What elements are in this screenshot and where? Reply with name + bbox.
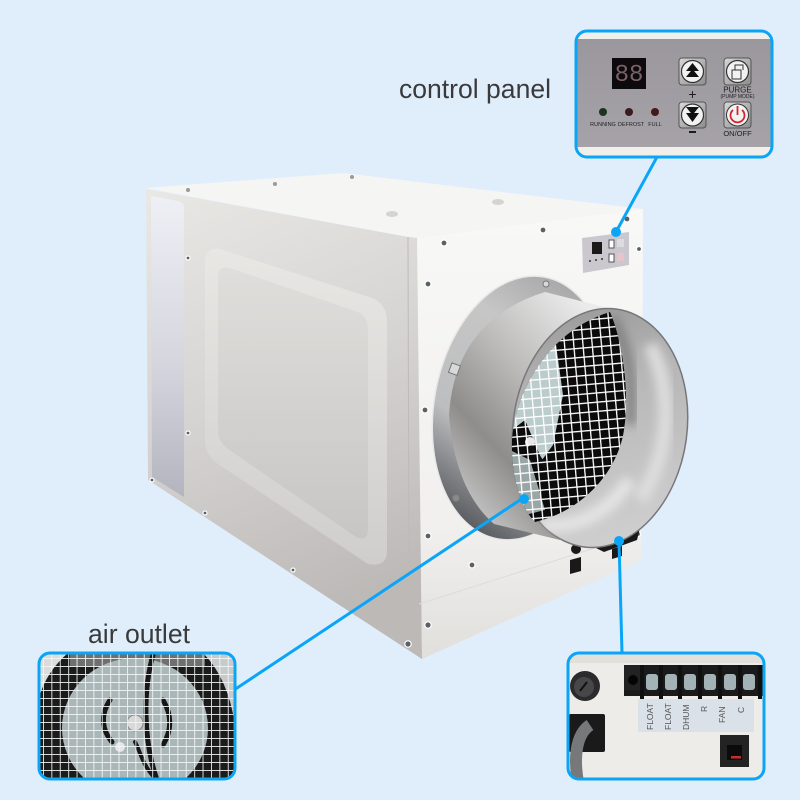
connector: air outlet	[234, 494, 529, 690]
mounting flange	[412, 262, 630, 554]
inset: air outlet close-up	[39, 653, 235, 798]
terminal labels: R	[699, 706, 709, 712]
connector: terminal block	[614, 536, 624, 653]
terminal labels: FLOAT	[645, 703, 655, 730]
up button	[679, 58, 706, 85]
embossed side panel	[205, 249, 387, 565]
bottom terminals and ports	[570, 528, 640, 574]
RJ phone jack	[720, 735, 749, 767]
down button	[679, 102, 706, 128]
terminal labels: FAN	[717, 706, 727, 723]
fan hub	[127, 715, 143, 731]
terminal block	[624, 665, 764, 699]
plus sign: +	[688, 86, 697, 102]
connector: control panel	[611, 157, 657, 237]
status lights: FULL	[648, 122, 662, 128]
duct body	[449, 292, 612, 540]
heading: control panel: control panel	[399, 74, 551, 104]
on/off button: ON/OFF	[723, 129, 752, 138]
digital display: 88	[615, 62, 643, 89]
wire mesh	[39, 653, 235, 779]
purge button: (PUMP MODE)	[720, 94, 755, 100]
flange brackets	[449, 281, 549, 502]
minus sign	[689, 131, 696, 133]
inset: terminal block close-up	[568, 653, 764, 782]
dehumidifier unit	[145, 173, 703, 659]
terminal labels	[638, 699, 754, 732]
fan blades	[103, 655, 170, 780]
duct opening	[512, 308, 688, 548]
side face	[146, 189, 422, 659]
unit control panel	[582, 232, 629, 273]
top bolts	[386, 199, 504, 217]
top face	[145, 173, 643, 238]
top screws	[186, 175, 354, 192]
purge button: PURGE	[723, 86, 752, 94]
screws	[150, 216, 642, 647]
status lights	[590, 108, 662, 126]
terminal labels: C	[736, 707, 746, 713]
grille	[512, 312, 626, 522]
heading: air outlet: air outlet	[88, 619, 190, 649]
round air outlet duct	[432, 276, 688, 548]
terminal labels: DHUM	[681, 704, 691, 730]
status lights: DEFROST	[618, 122, 645, 128]
status lights: RUNNING	[590, 122, 616, 128]
top casing	[70, 654, 205, 667]
fuse holder	[570, 671, 600, 701]
terminal labels: FLOAT	[663, 703, 673, 730]
on/off button	[723, 102, 752, 138]
fan disc	[62, 658, 208, 778]
purge button	[720, 58, 755, 100]
side air filter strip	[151, 196, 184, 497]
front face	[417, 209, 643, 659]
inset: control panel close-up	[576, 31, 772, 157]
power cable port	[569, 714, 605, 782]
